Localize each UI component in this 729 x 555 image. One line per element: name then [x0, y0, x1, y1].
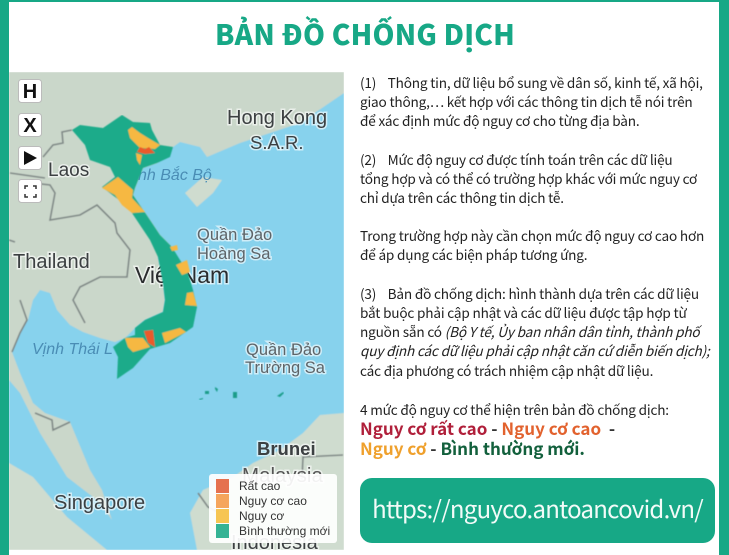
- map labels: S.A.R.: [250, 132, 303, 153]
- map labels: Malaysia: [242, 464, 323, 487]
- map labels: Singapore: [54, 492, 145, 514]
- islands: [199, 387, 284, 400]
- Vietnam risk map: [72, 115, 284, 400]
- legend: Nguy cơ: [239, 509, 284, 523]
- map button: fullscreen: [18, 180, 42, 202]
- url callout: [360, 478, 715, 543]
- title: BẢN ĐỒ CHỐNG DỊCH: [215, 14, 515, 54]
- map button: H: [18, 80, 42, 103]
- text block: explanation: quy định các dữ liệu phải cập nhật căn cứ diễn biến dịch);: [360, 340, 710, 360]
- region: normal (green): [72, 115, 197, 379]
- text block: explanation: [360, 72, 710, 419]
- map labels: Việt Nam: [135, 262, 229, 288]
- text block: explanation: (3) Bản đồ chống dịch: hình thành dựa trên các dữ liệu: [360, 283, 699, 303]
- legend: Rất cao: [239, 479, 281, 493]
- region: very high risk (red): [137, 147, 155, 347]
- text block: explanation: giao thông,… kết hợp với các thông tin dịch tễ nói trên: [360, 91, 693, 111]
- map base: sea and land: [9, 72, 344, 550]
- text block: explanation: chỉ dựa trên các thông tin dịch tễ.: [360, 187, 564, 207]
- text block: explanation: bắt buộc phải cập nhật và các dữ liệu được tập hợp từ: [360, 302, 687, 322]
- text block: explanation: (1) Thông tin, dữ liệu bổ sung về dân số, kinh tế, xã hội,: [360, 72, 703, 92]
- map labels: [13, 107, 327, 554]
- map labels: Trường Sa: [245, 359, 326, 377]
- legend: Bình thường mới: [239, 524, 330, 538]
- map labels: Quần Đảo: [197, 226, 272, 244]
- legend: Nguy cơ cao: [239, 494, 307, 508]
- risk levels text: [360, 415, 615, 460]
- map button: X: X: [23, 115, 37, 137]
- map labels: Thailand: [13, 251, 90, 273]
- map labels: Brunei: [257, 438, 316, 459]
- legend: [209, 474, 337, 543]
- text block: explanation: (2) Mức độ nguy cơ được tính toán trên các dữ liệu: [360, 149, 672, 169]
- map button: X: [18, 114, 42, 137]
- risk levels text: Nguy cơ rất cao - Nguy cơ cao -: [360, 415, 615, 440]
- text block: explanation: để áp dụng các biện pháp tương ứng.: [360, 244, 587, 264]
- map labels: nh Bắc Bộ: [138, 165, 212, 184]
- text block: explanation: 4 mức độ nguy cơ thể hiện trên bản đồ chống dịch:: [360, 399, 669, 419]
- map panel: [9, 72, 344, 550]
- map labels: Vịnh Thái L: [32, 341, 113, 358]
- map labels: Quần Đảo: [246, 341, 321, 359]
- text block: explanation: nguồn sẵn có (Bộ Y tế, Ủy ban nhân dân tỉnh, thành phố: [360, 321, 699, 341]
- map button: H: H: [23, 81, 37, 103]
- text block: explanation: các địa phương có trách nhiệm cập nhật dữ liệu.: [360, 360, 653, 380]
- text block: explanation: Trong trường hợp này cần chọn mức độ nguy cơ cao hơn: [360, 225, 704, 245]
- url callout: https://nguyco.antoancovid.vn/: [372, 490, 703, 525]
- map labels: Hoàng Sa: [197, 245, 271, 263]
- map labels: Hong Kong: [227, 107, 327, 129]
- map labels: Laos: [48, 160, 89, 181]
- text block: explanation: để xác định mức độ nguy cơ cho từng địa bàn.: [360, 110, 639, 130]
- region: risk (yellow): [102, 127, 197, 352]
- risk levels text: Nguy cơ - Bình thường mới.: [360, 435, 585, 460]
- map button: play: [18, 146, 42, 170]
- text block: explanation: tổng hợp và có thể có trường hợp khác với mức nguy cơ: [360, 168, 697, 188]
